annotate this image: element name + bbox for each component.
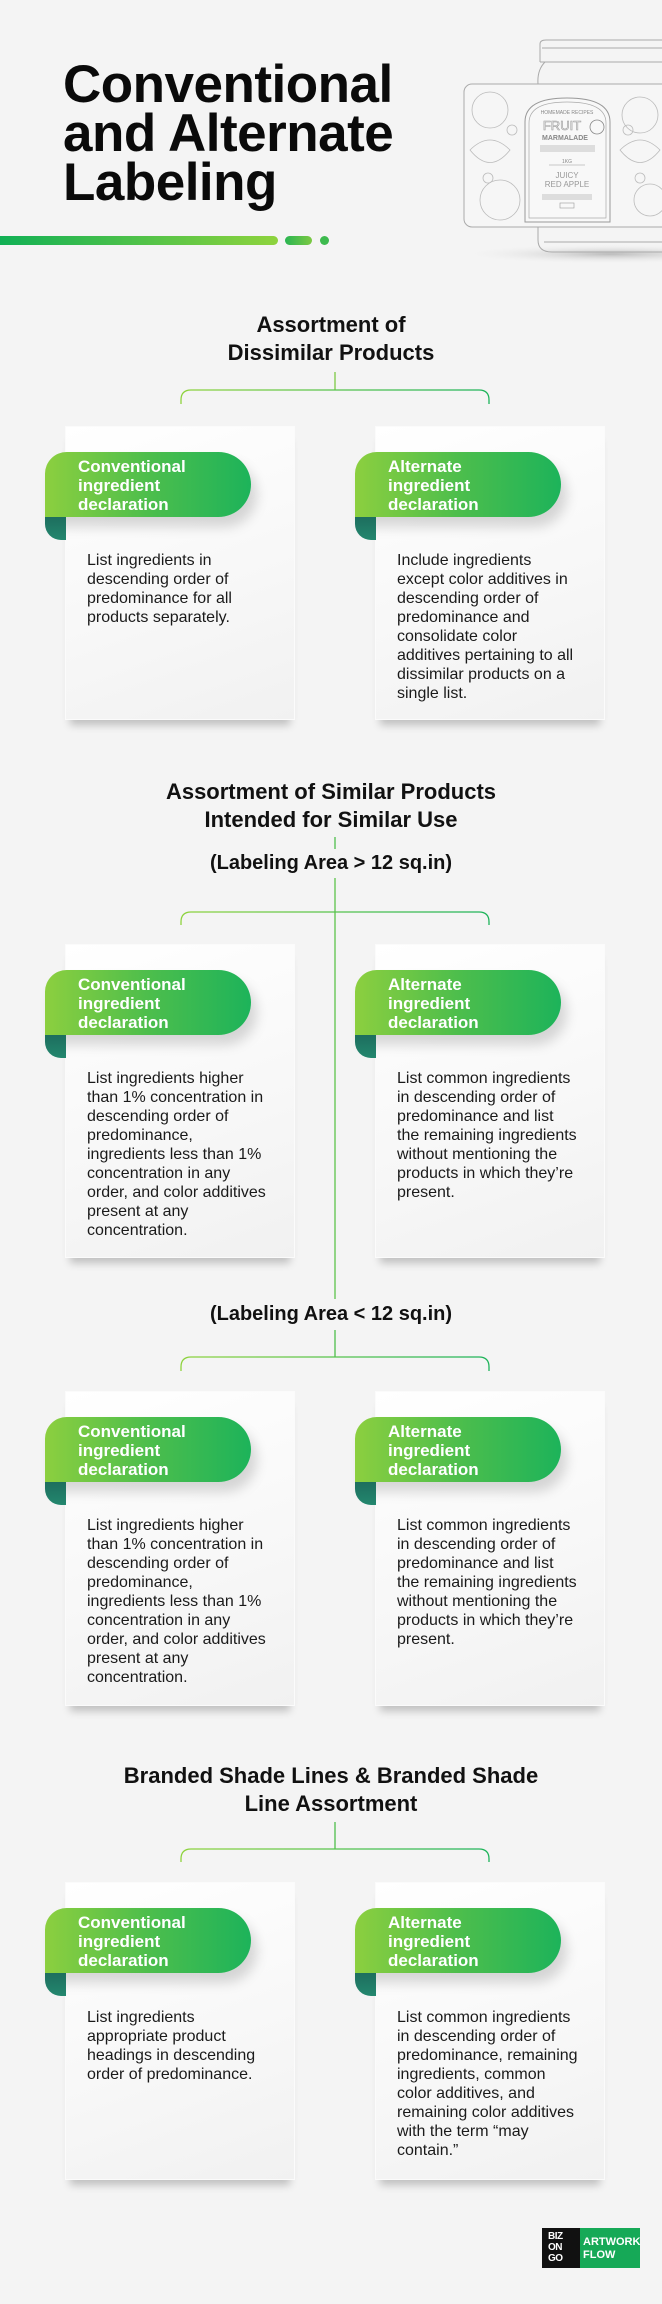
text: List ingredients higher [87,1517,244,1534]
ribbon: ingredient [388,476,470,495]
text: concentration in any [87,1612,230,1629]
title: and Alternate [63,104,393,163]
text: in descending order of [397,1089,555,1106]
ribbon: declaration [78,1951,169,1970]
logo: BIZ [548,2231,563,2242]
heading: dissimilar products: Assortment of [256,312,406,337]
text: List common ingredients [397,1070,570,1087]
text: present at any [87,1203,188,1220]
panel: >12 conventional [65,944,295,1258]
panel: >12 alternate [375,944,605,1258]
text: predominance, [87,1574,193,1591]
ribbon [45,970,251,1035]
heading: branded shade lines: Branded Shade Lines & Branded Shade [124,1763,538,1788]
label: < 12 sq.in: (Labeling Area < 12 sq.in) [210,1303,452,1325]
text: products in which they’re [397,1612,573,1629]
title: Conventional [63,55,393,114]
text [397,2009,578,2159]
text: in descending order of [397,1536,555,1553]
logo: ARTWORK [583,2236,640,2248]
text: ingredients, common [397,2066,546,2083]
heading: dissimilar products: Dissimilar Products [228,340,434,365]
ribbon: Conventional [78,1913,186,1932]
text: concentration in any [87,1165,230,1182]
logo [542,2228,640,2268]
text: List common ingredients [397,1517,570,1534]
ribbon: ingredient [78,476,160,495]
text: single list. [397,685,467,702]
ribbon [355,970,561,1035]
panel: branded alternate [375,1882,605,2180]
ribbon: declaration [78,1013,169,1032]
ribbon: declaration [78,495,169,514]
illustration: jar: FRUIT [543,118,581,133]
illustration: jar: RED APPLE [545,180,589,189]
text: present at any [87,1650,188,1667]
heading: similar products: Intended for Similar Use [204,807,458,832]
text: descending order of [87,1108,228,1125]
text: order of predominance. [87,2066,252,2083]
text [397,1070,577,1201]
text: contain.” [397,2142,458,2159]
heading: branded shade lines: Line Assortment [245,1791,417,1816]
ribbon: Alternate [388,457,462,476]
text: the remaining ingredients [397,1127,577,1144]
text: products separately. [87,609,230,626]
ribbon: Conventional [78,457,186,476]
illustration: jar: 1KG [562,159,572,165]
heading: similar products: Assortment of Similar Products [166,779,496,804]
heading: similar products [166,779,496,832]
text: in descending order of [397,2028,555,2045]
ribbon: ingredient [388,1441,470,1460]
ribbon: declaration [388,1951,479,1970]
decorative green bar [0,236,329,245]
text: predominance and [397,609,530,626]
panel: branded conventional [65,1882,295,2180]
panel: dissimilar conventional [65,426,295,720]
text: ingredients less than 1% [87,1146,261,1163]
text: appropriate product [87,2028,226,2045]
text: order, and color additives [87,1184,266,1201]
ribbon: declaration [78,1460,169,1479]
text: remaining color additives [397,2104,574,2121]
text [397,552,573,702]
text: concentration. [87,1669,188,1686]
text: Include ingredients [397,552,531,569]
text: predominance and list [397,1555,554,1572]
text: concentration. [87,1222,188,1239]
illustration: jar: JUICY [555,171,579,180]
illustration: jar: HOMEMADE RECIPES [541,110,594,116]
text: List common ingredients [397,2009,570,2026]
ribbon: Conventional [78,975,186,994]
ribbon: ingredient [388,1932,470,1951]
text: predominance and list [397,1108,554,1125]
ribbon: declaration [388,495,479,514]
logo: GO [548,2253,563,2264]
ribbon [45,1417,251,1482]
ribbon: declaration [388,1013,479,1032]
text: present. [397,1631,455,1648]
text: products in which they’re [397,1165,573,1182]
text: predominance for all [87,590,232,607]
ribbon: ingredient [78,1932,160,1951]
text: with the term “may [397,2123,529,2140]
text: List ingredients [87,2009,195,2026]
ribbon: Conventional [78,1422,186,1441]
text: color additives, and [397,2085,535,2102]
logo: ON [548,2242,562,2253]
title [63,55,393,212]
ribbon [355,452,561,517]
illustration: jar: MARMALADE [542,135,588,142]
text: descending order of [87,571,228,588]
ribbon: declaration [388,1460,479,1479]
text: dissimilar products on a [397,666,565,683]
panel: <12 alternate [375,1391,605,1706]
text: additives pertaining to all [397,647,573,664]
text: without mentioning the [397,1593,557,1610]
ribbon [45,452,251,517]
text: without mentioning the [397,1146,557,1163]
ribbon [355,1417,561,1482]
ribbon: ingredient [78,1441,160,1460]
text: List ingredients in [87,552,212,569]
text [397,1517,577,1648]
heading: dissimilar products [228,312,434,365]
title: Labeling [63,153,277,212]
text [87,2009,255,2083]
text: descending order of [397,590,538,607]
text: predominance, remaining [397,2047,578,2064]
ribbon: Alternate [388,1422,462,1441]
text: List ingredients higher [87,1070,244,1087]
ribbon [355,1908,561,1973]
text [87,1517,266,1686]
text: the remaining ingredients [397,1574,577,1591]
illustration: jar [464,40,662,260]
text: order, and color additives [87,1631,266,1648]
heading: branded shade lines [124,1763,538,1816]
text: ingredients less than 1% [87,1593,261,1610]
text [87,552,232,626]
text: than 1% concentration in [87,1536,263,1553]
ribbon [45,1908,251,1973]
text: except color additives in [397,571,568,588]
text: consolidate color [397,628,517,645]
panel: dissimilar alternate [375,426,605,720]
panel: <12 conventional [65,1391,295,1706]
text: than 1% concentration in [87,1089,263,1106]
ribbon: Alternate [388,975,462,994]
text: present. [397,1184,455,1201]
text: predominance, [87,1127,193,1144]
text [87,1070,266,1239]
logo: FLOW [583,2249,615,2261]
label: > 12 sq.in: (Labeling Area > 12 sq.in) [210,852,452,874]
text: headings in descending [87,2047,255,2064]
text: descending order of [87,1555,228,1572]
ribbon: ingredient [388,994,470,1013]
ribbon: Alternate [388,1913,462,1932]
ribbon: ingredient [78,994,160,1013]
